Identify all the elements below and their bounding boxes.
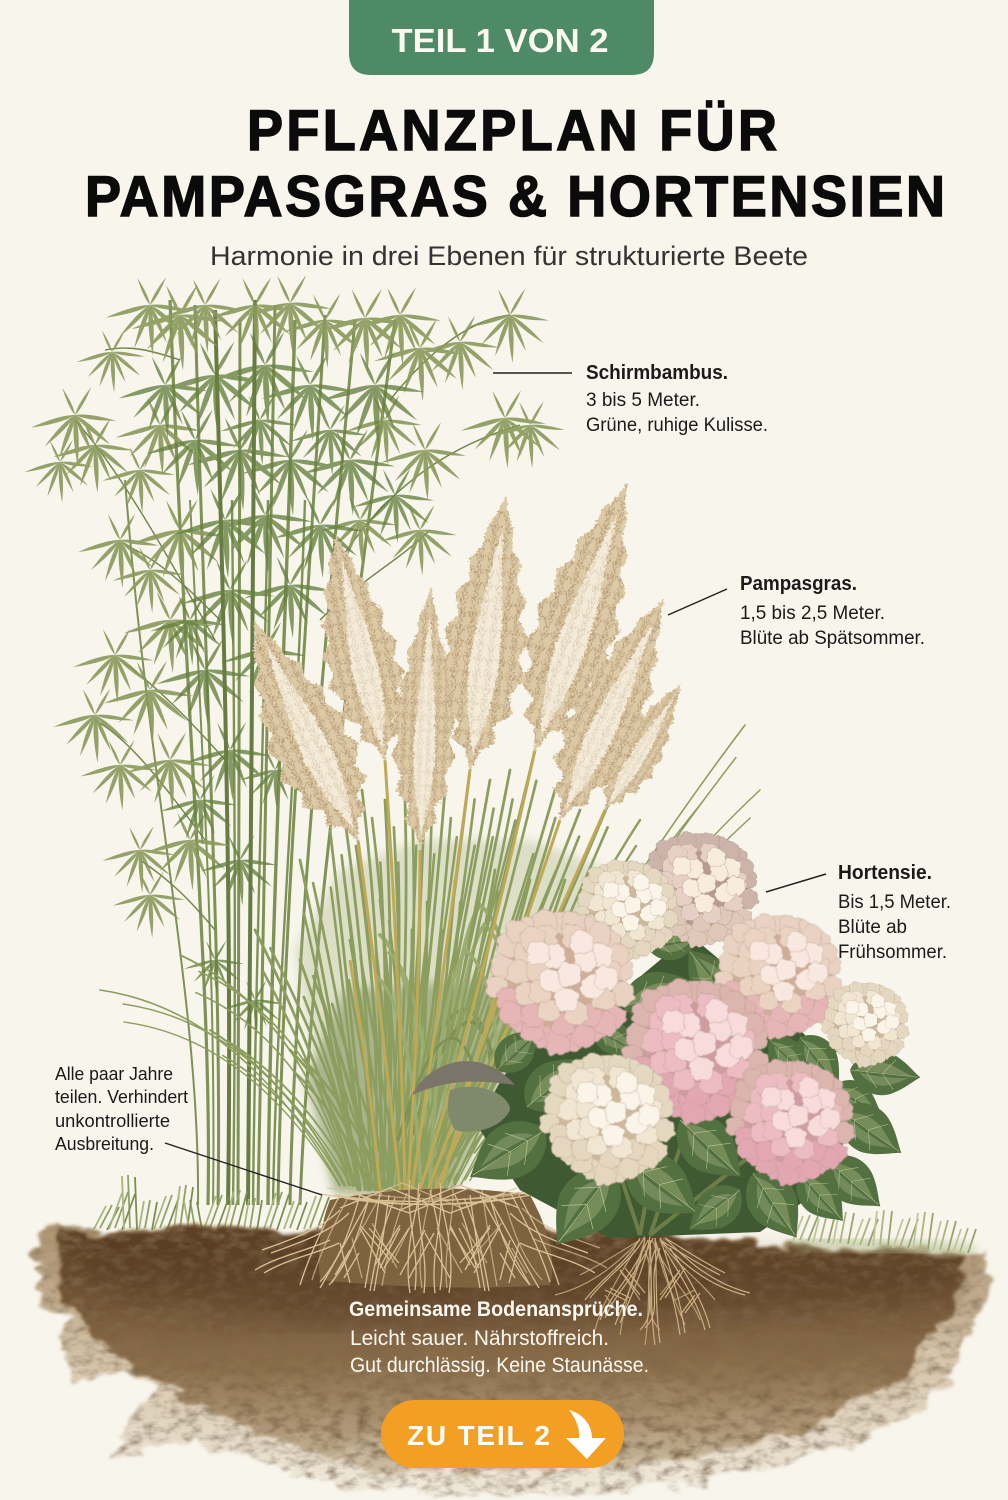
callout: dividing note [55, 1064, 322, 1195]
text block: soil requirements: Gut durchlässig. Keine Staunässe. [350, 1354, 649, 1377]
callout: dividing note: Alle paar Jahre [55, 1064, 173, 1084]
root ball: hydrangea [555, 1236, 750, 1345]
illustration: pampas grass [100, 468, 760, 1195]
flower stalks [350, 750, 605, 1190]
label: Hortensie: Hortensie. [838, 862, 932, 884]
label: Pampasgras [668, 573, 925, 649]
callout: dividing note: Ausbreitung. [55, 1134, 154, 1154]
bamboo stems [125, 300, 395, 1205]
illustration: hydrangea shrub [412, 832, 976, 1262]
label: Schirmbambus: 3 bis 5 Meter. [586, 390, 700, 411]
label: Pampasgras: 1,5 bis 2,5 Meter. [740, 603, 885, 624]
icon: curved down arrow [566, 1410, 606, 1459]
label: Schirmbambus: Grüne, ruhige Kulisse. [586, 415, 768, 436]
callout: dividing note: teilen. Verhindert [55, 1087, 188, 1107]
bamboo dense inner foliage [118, 331, 434, 1035]
text block: soil requirements: Gemeinsame Bodenansprüche. [349, 1298, 643, 1321]
ground grass, right [790, 1210, 976, 1253]
label: Schirmbambus [493, 362, 768, 436]
ground grass, left [90, 1175, 330, 1230]
foliage underlay [295, 840, 610, 1190]
dark foliage mass [480, 935, 850, 1238]
subtitle: Harmonie in drei Ebenen für strukturierte Beete [210, 241, 808, 271]
hydrangea leaves [455, 919, 923, 1262]
bamboo leaf clusters [24, 274, 565, 938]
illustration: bamboo backdrop [24, 274, 565, 1230]
root ball: pampas grass [255, 1178, 607, 1293]
purple-grey leaves [412, 1061, 515, 1132]
label: Schirmbambus: Schirmbambus. [586, 362, 728, 384]
text block: soil requirements: Leicht sauer. Nährstoffreich. [350, 1327, 609, 1350]
tab: part indicator [349, 0, 654, 75]
label: Pampasgras: Blüte ab Spätsommer. [740, 628, 925, 649]
soil cross-section [29, 1228, 990, 1493]
title: PAMPASGRAS & HORTENSIEN [85, 165, 945, 228]
label: Pampasgras: Pampasgras. [740, 573, 857, 595]
plumes [213, 468, 701, 861]
title: PFLANZPLAN FÜR [247, 99, 777, 162]
hydrangea blooms [486, 832, 909, 1185]
label: Hortensie: Blüte ab [838, 917, 907, 938]
grass blades [100, 725, 760, 1190]
callout: dividing note: unkontrollierte [55, 1111, 170, 1131]
title [85, 99, 945, 228]
button: next part: ZU TEIL 2 [407, 1420, 550, 1451]
label: Hortensie [766, 862, 951, 963]
text block: soil requirements [349, 1298, 649, 1377]
bamboo branches [75, 315, 520, 930]
label: Hortensie: Bis 1,5 Meter. [838, 892, 951, 913]
stems [612, 1040, 860, 1235]
tab: part indicator: TEIL 1 VON 2 [392, 22, 608, 59]
button: next part [381, 1400, 624, 1468]
label: Hortensie: Frühsommer. [838, 942, 947, 963]
